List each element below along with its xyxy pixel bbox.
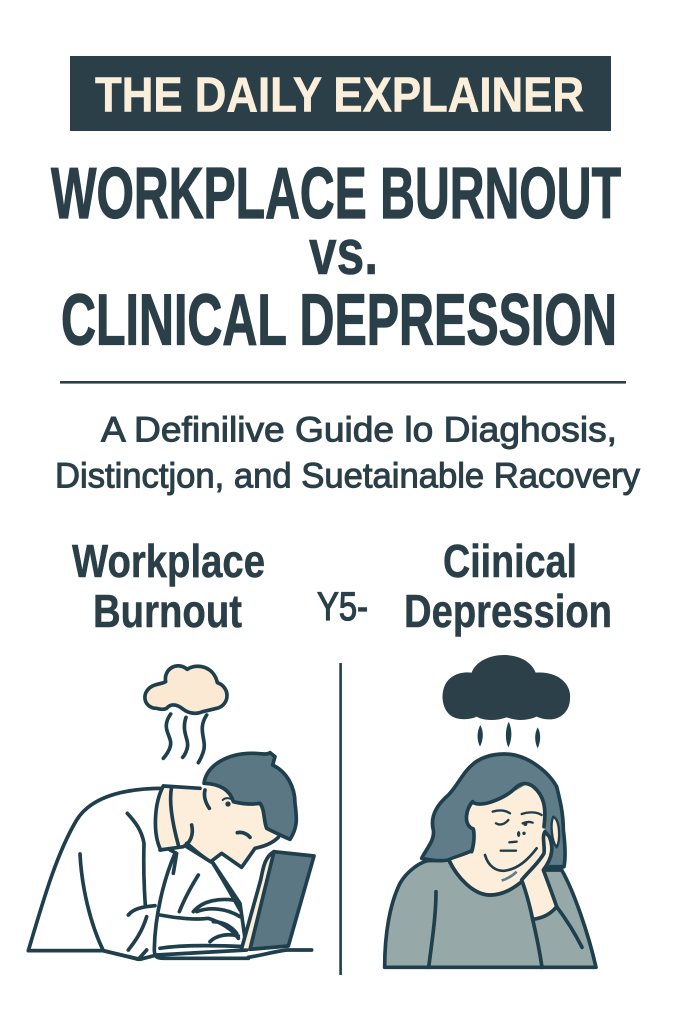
icon: steam cloud [145,666,227,763]
subtitle: A Definilive Guide lo Diaghosis, [101,410,617,450]
woman sweater [385,860,596,967]
masthead banner: THE DAILY EXPLAINER [95,68,584,122]
man face and neck [156,786,277,867]
title [51,154,621,360]
heading: workplace burnout: Burnout [93,585,242,637]
icon: rain cloud [442,655,570,748]
divider rule [60,381,626,384]
illustration: burned out man at laptop [28,666,314,959]
heading: clinical depression [404,535,612,637]
versus label: Y5- [317,585,368,629]
subtitle [55,410,640,496]
illustration: depressed woman [385,655,596,967]
man body [28,788,247,959]
laptop [28,852,314,957]
woman hand [522,832,557,919]
heading: clinical depression: Ciinical [443,535,577,587]
man shirt lines [80,813,248,959]
heading: workplace burnout [72,535,265,637]
masthead banner [70,56,611,131]
subtitle: Distinctjon, and Suetainable Racovery [55,456,640,496]
heading: clinical depression: Depression [404,585,612,637]
man face lines [155,786,278,873]
heading: workplace burnout: Workplace [72,535,265,587]
woman face [450,784,550,895]
woman hair [422,754,565,867]
man hair [204,753,296,839]
woman sleeve lines [429,892,436,967]
title: vs. [309,216,378,288]
vertical divider [339,663,342,975]
